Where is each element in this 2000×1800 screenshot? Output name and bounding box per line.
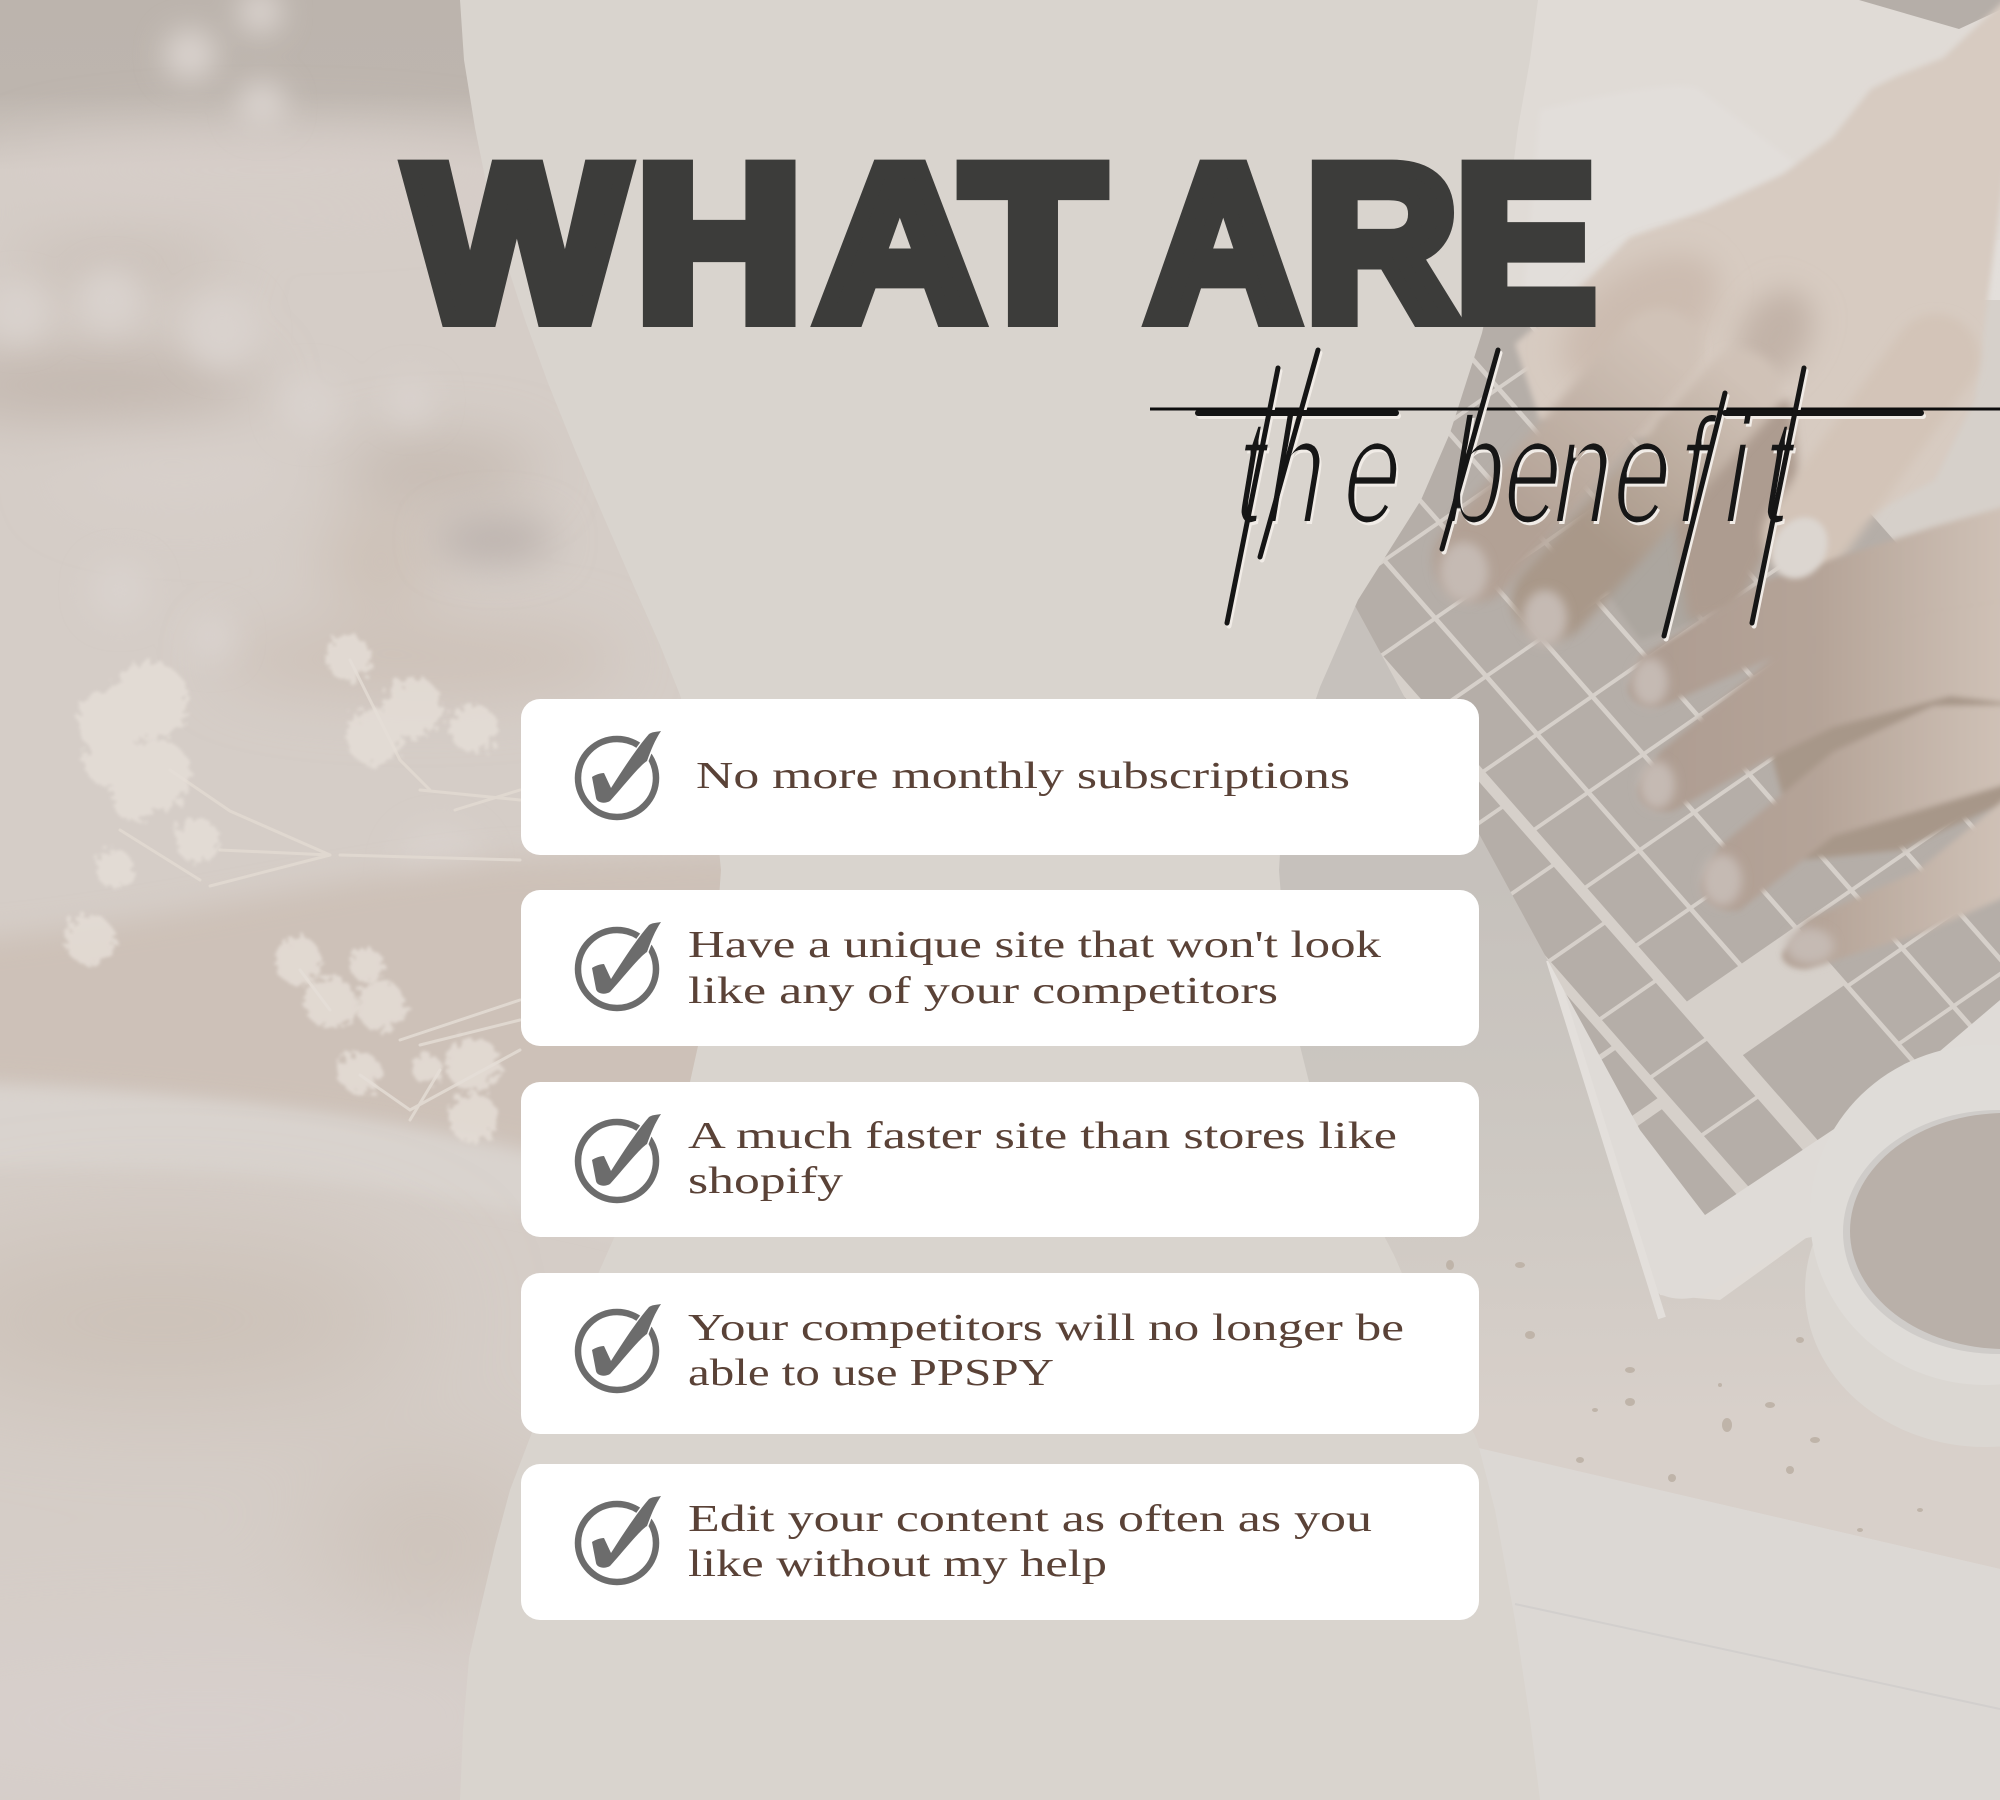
flower stems xyxy=(120,660,520,1120)
text: competitors ppspy xyxy=(688,1307,1404,1394)
finger 2 xyxy=(1638,600,2000,812)
icon: check 1 xyxy=(578,731,661,817)
text: edit content: Edit your content as often as you xyxy=(688,1498,1372,1540)
flower clusters xyxy=(65,635,500,1143)
card 2 xyxy=(521,890,1479,1046)
title: WHAT ARE: ARE xyxy=(1147,120,1596,366)
coffee cup xyxy=(1805,1045,2000,1447)
card 1 xyxy=(521,699,1479,855)
fingernails xyxy=(1440,542,1834,964)
text: competitors ppspy: able to use PPSPY xyxy=(688,1352,1054,1394)
card 4 xyxy=(521,1273,1479,1434)
script subtitle: the benefit xyxy=(1198,350,1921,636)
icon: check 3 xyxy=(578,1114,661,1200)
table xyxy=(1220,560,2000,1569)
text: edit content: like without my help xyxy=(688,1543,1107,1585)
text: unique site: Have a unique site that won't look xyxy=(688,924,1381,966)
keyboard keys xyxy=(1356,300,2000,1215)
background photo: hands typing on a laptop xyxy=(1279,0,2000,1532)
title: WHAT ARE: WHAT xyxy=(408,120,1103,366)
title: WHAT ARE xyxy=(408,120,1596,366)
fabric fold xyxy=(0,850,800,1250)
card 3 xyxy=(521,1082,1479,1237)
central hourglass panel xyxy=(460,0,1540,1800)
icon: check 4 xyxy=(578,1304,661,1390)
script subtitle: the benefit: the benefit xyxy=(1234,385,1799,556)
finger 3 xyxy=(1701,705,2000,911)
table speckles xyxy=(1446,1260,1923,1532)
background photo: dried flowers on fabric xyxy=(0,0,800,1800)
card 5 xyxy=(521,1464,1479,1620)
finger 4 xyxy=(1782,795,2000,969)
text: faster site xyxy=(688,1115,1397,1202)
icon: check 2 xyxy=(578,922,661,1008)
text: competitors ppspy: Your competitors will no longer be xyxy=(688,1307,1404,1349)
dark corner behind laptop xyxy=(1859,0,2000,29)
upper hand xyxy=(1475,0,2000,640)
finger 1 xyxy=(1628,505,2000,707)
text: unique site: like any of your competitors xyxy=(688,970,1278,1012)
text: unique site xyxy=(688,924,1381,1012)
heading rule xyxy=(1150,408,2000,410)
lower hand xyxy=(1628,505,2000,969)
laptop base xyxy=(1345,340,2000,1299)
bottom paper xyxy=(1470,1446,2000,1800)
page on laptop xyxy=(1520,86,1830,330)
text: no more monthly subscriptions: No more monthly subscriptions xyxy=(696,755,1350,797)
blurred background flowers xyxy=(0,0,484,960)
right light area xyxy=(1985,240,2000,510)
text: faster site: shopify xyxy=(688,1160,843,1202)
icon: check 5 xyxy=(578,1496,661,1582)
text: faster site: A much faster site than stores like xyxy=(688,1115,1397,1157)
text: edit content xyxy=(688,1498,1372,1585)
